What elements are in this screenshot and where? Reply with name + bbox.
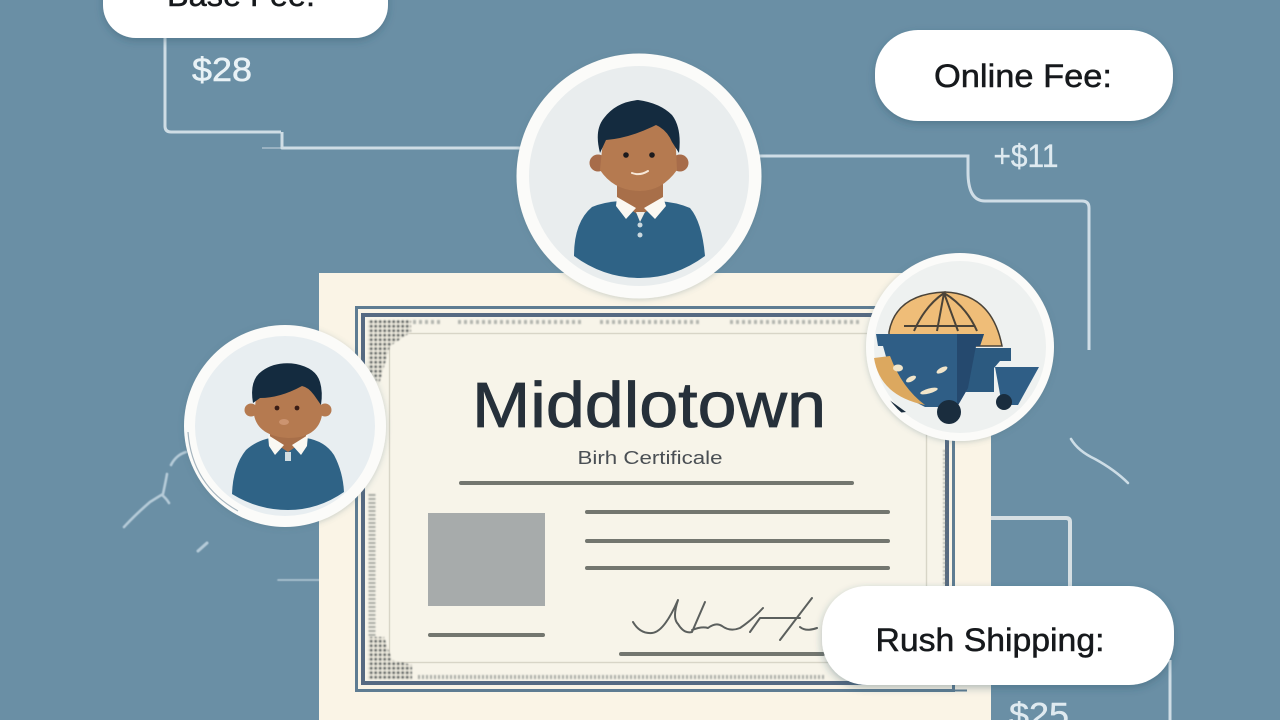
ears (244, 404, 256, 416)
face (600, 118, 677, 191)
debris (893, 364, 948, 396)
dumpster body (876, 334, 984, 407)
signature (633, 598, 817, 640)
hair (598, 100, 680, 153)
wheels (937, 400, 961, 424)
callout: base fee (103, 0, 388, 38)
side box (966, 348, 1011, 392)
certificate detail lines (585, 510, 890, 570)
portrait: top (516, 54, 762, 298)
certificate rule (459, 481, 854, 485)
connector: base fee to portrait (165, 38, 525, 148)
trailer (995, 367, 1039, 405)
connector: online fee to portrait (755, 156, 1089, 350)
callout: rush shipping: Rush Shipping: (876, 622, 1104, 658)
neck (617, 184, 663, 214)
photo placeholder (428, 513, 545, 606)
value: +$11: +$11 (994, 138, 1058, 174)
certificate (319, 273, 991, 720)
collar (616, 197, 666, 219)
sweater (574, 201, 705, 278)
portrait: left (184, 325, 386, 527)
photo caption rule (428, 633, 545, 637)
signature rule (619, 652, 825, 656)
certificate subtitle: Birh Certificale (578, 448, 722, 468)
neck (270, 434, 306, 452)
eyes (623, 152, 629, 158)
face (254, 386, 322, 438)
connector: rush shipping to certificate (990, 518, 1170, 720)
smile (632, 171, 648, 174)
decorative strokes: left (124, 452, 320, 580)
collar (268, 435, 308, 455)
eyes (275, 406, 279, 410)
value: $28: $28 (192, 51, 252, 88)
certificate title: Middlotown (472, 369, 826, 441)
shipping icon (866, 253, 1054, 441)
nose (279, 419, 289, 425)
callout: rush shipping (822, 586, 1174, 685)
hair (252, 363, 322, 405)
ears (590, 154, 602, 172)
certificate ornaments (368, 320, 945, 680)
sweater (232, 438, 344, 510)
globe (889, 292, 1002, 346)
callout: online fee: Online Fee: (934, 58, 1112, 94)
callout: online fee (875, 30, 1173, 121)
cargo sweep (874, 356, 925, 405)
certificate paper (319, 273, 991, 720)
certificate frame (356, 308, 967, 690)
decorative stroke: right (1071, 439, 1128, 483)
